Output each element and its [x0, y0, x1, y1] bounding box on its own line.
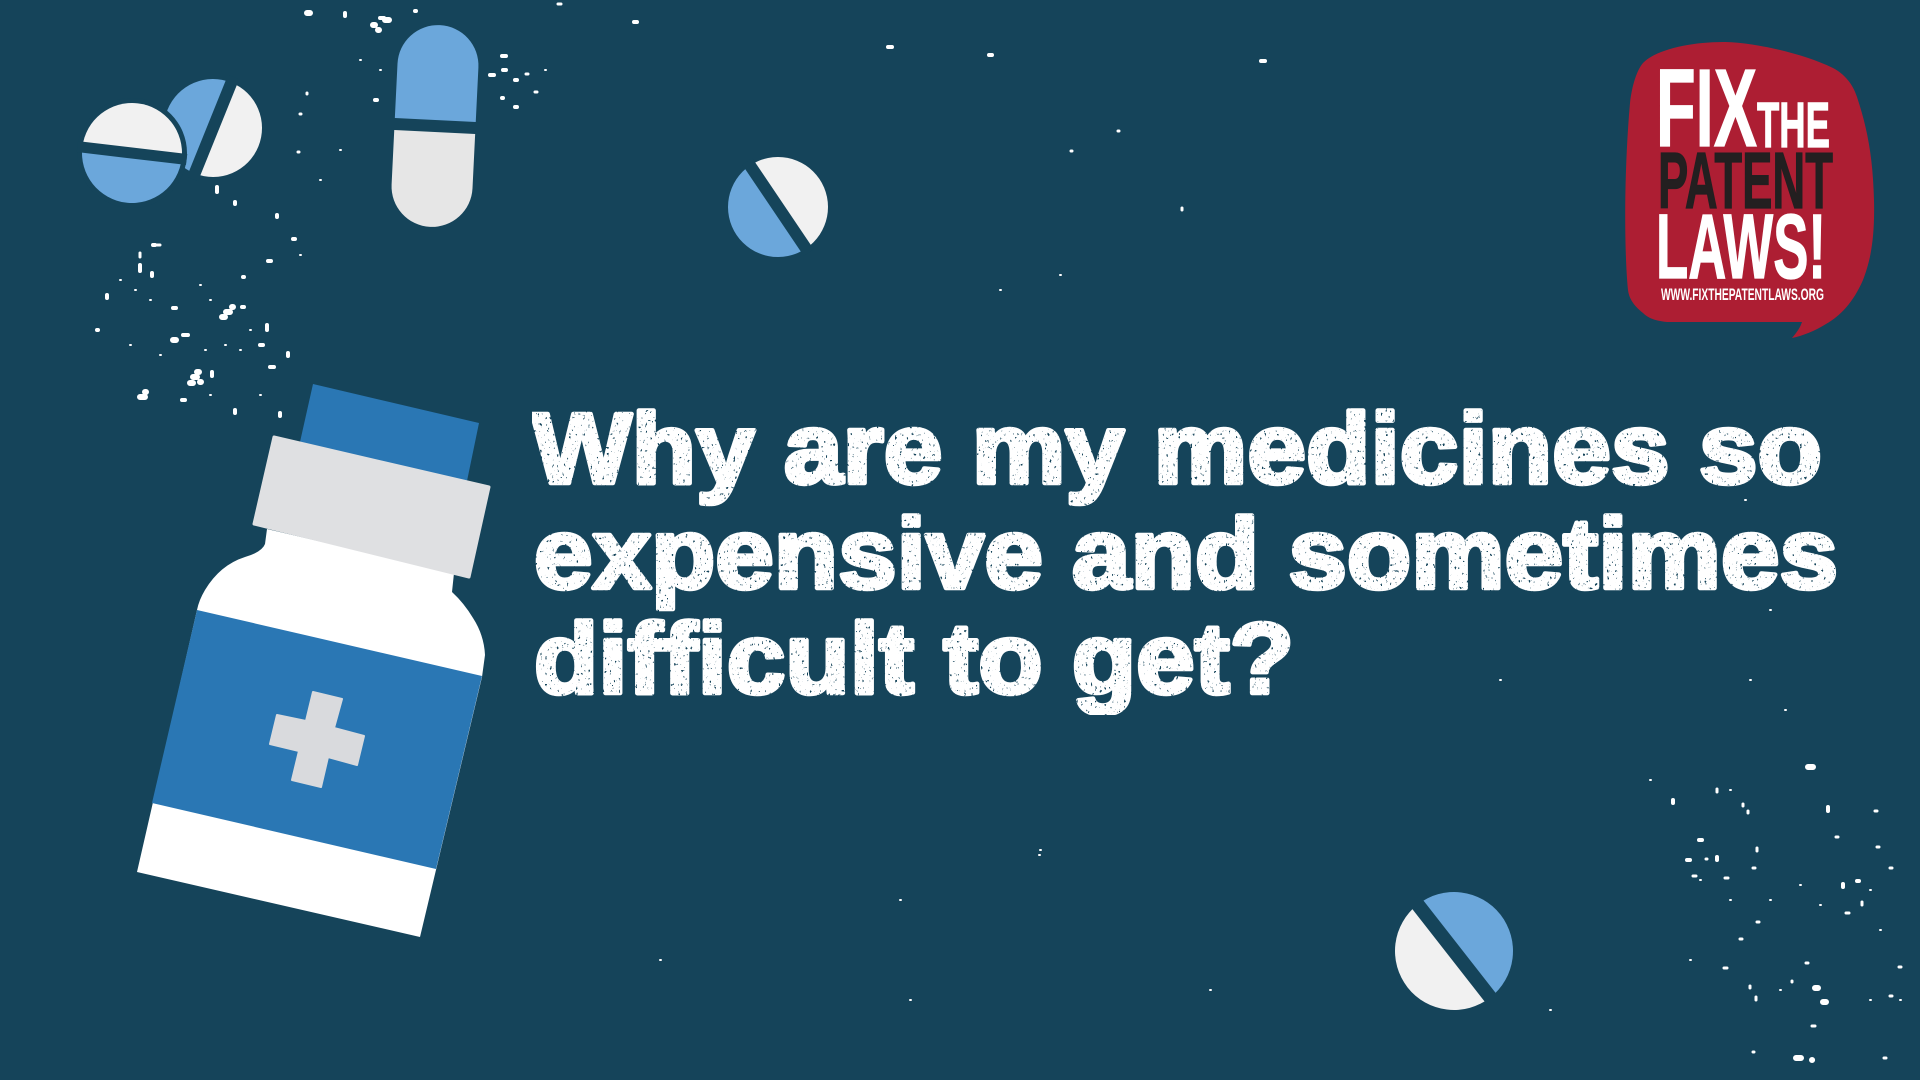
logo wordmark: FIX: [1656, 47, 1757, 170]
title: expensive and sometimes: [534, 498, 1838, 610]
bottle label: [152, 610, 482, 869]
bottle cap: [300, 384, 479, 481]
icon: medical cross: [270, 692, 364, 787]
logo wordmark: THE: [1757, 89, 1830, 161]
pill: white and blue tablet in front: [72, 97, 192, 209]
title: Why are my medicines so: [532, 393, 1822, 505]
logo wordmark: [1656, 47, 1833, 304]
title: [532, 393, 1838, 715]
title: difficult to get?: [534, 603, 1294, 715]
pill: tablet bottom right: [1367, 863, 1541, 1039]
medicine bottle: [137, 384, 489, 937]
bottle body: [137, 529, 485, 937]
logo bubble: [1625, 42, 1874, 338]
pill: blue and white tablet behind: [147, 59, 279, 197]
logo: Fix the Patent Laws speech bubble: [1625, 42, 1874, 338]
pill: tablet top centre: [706, 133, 850, 281]
bottle collar: [254, 437, 489, 577]
capsule: [390, 23, 480, 229]
